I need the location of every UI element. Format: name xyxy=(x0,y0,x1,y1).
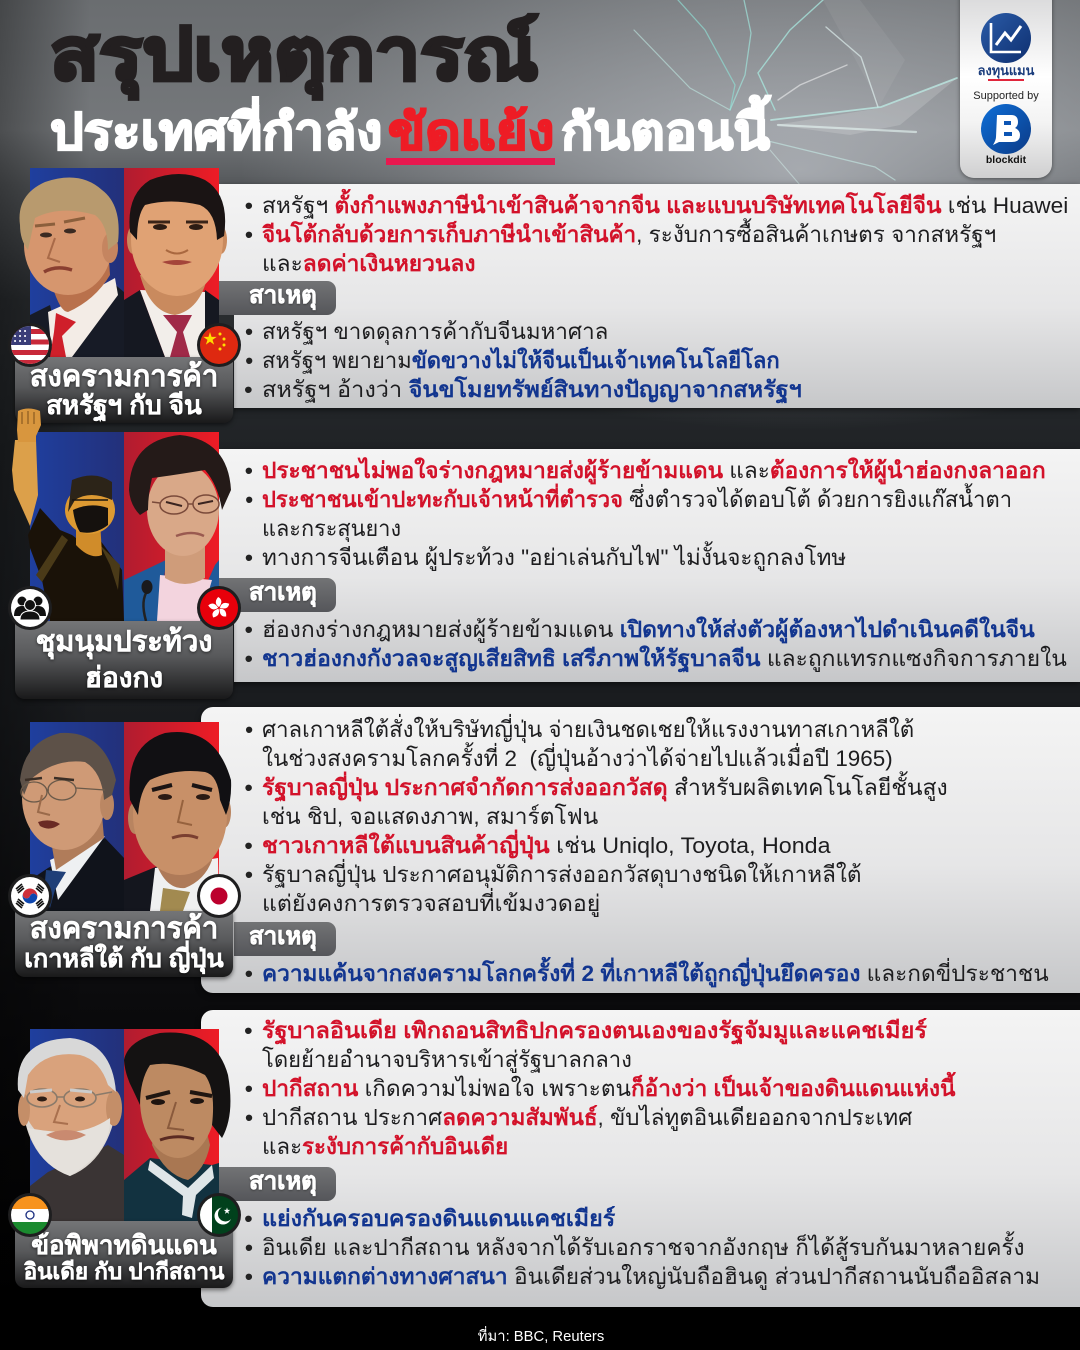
flags: India and Pakistan xyxy=(8,1193,241,1237)
card: territory dispute India and Pakistan xyxy=(8,1010,1080,1307)
tag: cause: สาเหตุ xyxy=(249,579,317,606)
flags: Korea and Japan xyxy=(8,874,241,918)
logo: blockdit xyxy=(981,104,1031,154)
flag: Pakistan xyxy=(197,1193,241,1237)
card: trade war Korea and Japan xyxy=(8,707,1080,993)
plate: trade war title xyxy=(15,911,233,977)
bullets: events: ในช่วงสงครามโลกครั้งที่ 2 (ญี่ปุ่นอ้างว่าได้จ่ายไปแล้วเมื่อปี 1965) xyxy=(262,746,893,771)
bullets: events: ประชาชนเข้าปะทะกับเจ้าหน้าที่ตำรวจ ซึ่งตำรวจได้ตอบโต้ ด้วยการยิงแก๊สน้ำตา xyxy=(262,487,1012,512)
plate: territory dispute title: ข้อพิพาทดินแดน xyxy=(31,1230,217,1260)
supported by: Supported by xyxy=(973,90,1039,102)
bullets: events xyxy=(246,457,1044,571)
bullets: events: แต่ยังคงการตรวจสอบที่เข้มงวดอยู่ xyxy=(262,891,600,916)
panel: India Pakistan text xyxy=(201,1010,1080,1307)
title line 1: สรุปเหตุการณ์ xyxy=(50,15,538,95)
tag: cause: สาเหตุ xyxy=(249,1168,317,1195)
bullets: events: รัฐบาลญี่ปุ่น ประกาศอนุมัติการส่งออกวัสดุบางชนิดให้เกาหลีใต้ xyxy=(262,862,861,887)
plate: trade war title xyxy=(15,357,233,423)
bullets: causes xyxy=(246,616,1066,673)
tag: cause: สาเหตุ xyxy=(249,282,317,309)
plate: trade war title: สงครามการค้า xyxy=(30,361,218,393)
plate: trade war title: สงครามการค้า xyxy=(30,913,218,945)
title xyxy=(50,12,772,165)
plate: territory dispute title: อินเดีย กับ ปากีสถาน xyxy=(24,1259,224,1284)
tag: cause xyxy=(219,1167,336,1201)
title line 2: กันตอนนี้ xyxy=(561,104,770,160)
source note: ที่มา: BBC, Reuters xyxy=(478,1329,604,1345)
bullets: causes: สหรัฐฯ พยายามขัดขวางไม่ให้จีนเป็นเจ้าเทคโนโลยีโลก xyxy=(262,348,780,373)
bullets: events: ประชาชนไม่พอใจร่างกฎหมายส่งผู้ร้ายข้ามแดน และต้องการให้ผู้นำฮ่องกงลาออก xyxy=(262,458,1046,483)
bullets: events: ปากีสถาน เกิดความไม่พอใจ เพราะตนก็อ้างว่า เป็นเจ้าของดินแดนแห่งนี้ xyxy=(262,1076,955,1101)
bullets: causes: สหรัฐฯ อ้างว่า จีนขโมยทรัพย์สินทางปัญญาจากสหรัฐฯ xyxy=(262,377,802,402)
plate: trade war title: สหรัฐฯ กับ จีน xyxy=(46,390,202,420)
bullets: events: สหรัฐฯ ตั้งกำแพงภาษีนำเข้าสินค้าจากจีน และแบนบริษัทเทคโนโลยีจีน เช่น Huawei xyxy=(262,193,1068,218)
logo: ลงทุนแมน xyxy=(981,13,1031,63)
bullets: events: ปากีสถาน ประกาศลดความสัมพันธ์, ขับไล่ทูตอินเดียออกจากประเทศ xyxy=(262,1105,912,1130)
card: Hong Kong protest xyxy=(8,408,1080,701)
bullets: events: จีนโต้กลับด้วยการเก็บภาษีนำเข้าสินค้า, ระงับการซื้อสินค้าเกษตร จากสหรัฐฯ xyxy=(262,222,996,247)
flags: US and China xyxy=(11,323,241,367)
title line 2: ประเทศที่กำลัง xyxy=(50,104,382,160)
photo: Moon and Abe xyxy=(20,722,232,911)
plate: protest title: ชุมนุมประท้วง xyxy=(36,626,212,658)
panel: US China text xyxy=(219,184,1080,408)
bullets: causes xyxy=(245,320,801,404)
bullets: events: ชาวเกาหลีใต้แบนสินค้าญี่ปุ่น เช่น Uniqlo, Toyota, Honda xyxy=(262,833,831,858)
plate: protest title xyxy=(15,621,233,699)
title line 2: ขัดแย้ง xyxy=(388,104,554,160)
title underline xyxy=(386,158,555,165)
title line 2 xyxy=(50,94,772,160)
bullets: events xyxy=(245,714,948,917)
flags: protest and Hong Kong xyxy=(8,586,241,630)
logo name: ลงทุนแมน xyxy=(978,63,1034,78)
bullets: causes: ฮ่องกงร่างกฎหมายส่งผู้ร้ายข้ามแดน เปิดทางให้ส่งตัวผู้ต้องหาไปดำเนินคดีในจีน xyxy=(262,617,1035,642)
bullets: causes: ชาวฮ่องกงกังวลจะสูญเสียสิทธิ เสรีภาพให้รัฐบาลจีน และถูกแทรกแซงกิจการภายใน xyxy=(262,646,1067,671)
flag: United States xyxy=(11,326,52,367)
photo: protester and Carrie Lam xyxy=(12,408,231,621)
flag: Japan xyxy=(197,874,241,918)
plate: protest title: ฮ่องกง xyxy=(85,662,163,693)
bullets: events xyxy=(246,188,1067,272)
bullets: events: ศาลเกาหลีใต้สั่งให้บริษัทญี่ปุ่น จ่ายเงินชดเชยให้แรงงานทาสเกาหลีใต้ xyxy=(262,717,914,742)
bullets: events: และกระสุนยาง xyxy=(262,516,401,541)
bullets: causes: สหรัฐฯ ขาดดุลการค้ากับจีนมหาศาล xyxy=(262,319,608,344)
tag: cause xyxy=(219,281,336,315)
blockdit name: blockdit xyxy=(986,154,1026,166)
photo: Modi and Imran Khan xyxy=(18,1029,230,1221)
bullets: events: เช่น ชิป, จอแสดงภาพ, สมาร์ตโฟน xyxy=(262,804,598,829)
icon: protesters xyxy=(8,586,52,630)
bullets: causes: ความแตกต่างทางศาสนา อินเดียส่วนใหญ่นับถือฮินดู ส่วนปากีสถานนับถืออิสลาม xyxy=(262,1264,1040,1289)
bullets: causes: แย่งกันครอบครองดินแดนแคชเมียร์ xyxy=(262,1206,615,1231)
bullets: events: และลดค่าเงินหยวนลง xyxy=(262,251,475,276)
bullets: events: และระงับการค้ากับอินเดีย xyxy=(262,1134,508,1159)
panel: Korea Japan text xyxy=(201,707,1080,993)
tag: cause xyxy=(234,922,336,956)
bullets: events: ทางการจีนเตือน ผู้ประท้วง "อย่าเล่นกับไฟ" ไม่งั้นจะถูกลงโทษ xyxy=(262,545,846,570)
logo underline xyxy=(988,79,1024,80)
flag: India xyxy=(8,1193,52,1237)
plate: trade war title: เกาหลีใต้ กับ ญี่ปุ่น xyxy=(24,945,224,973)
plate: territory dispute title xyxy=(15,1221,233,1288)
icon: cracked glass xyxy=(634,0,958,184)
bullets: causes: อินเดีย และปากีสถาน หลังจากได้รับเอกราชจากอังกฤษ ก็ได้สู้รบกันมาหลายครั้ง xyxy=(262,1235,1025,1260)
bullets: events: รัฐบาลญี่ปุ่น ประกาศจำกัดการส่งออกวัสดุ สำหรับผลิตเทคโนโลยีชั้นสูง xyxy=(262,775,948,800)
flag: South Korea xyxy=(8,874,52,918)
card: trade war US and China xyxy=(11,168,1080,426)
flag: China xyxy=(197,323,241,367)
bullets: events xyxy=(245,1018,956,1159)
bullets: causes xyxy=(245,1206,1040,1290)
bullets: events: รัฐบาลอินเดีย เพิกถอนสิทธิปกครองตนเองของรัฐจัมมูและแคชเมียร์ xyxy=(262,1018,927,1043)
bullets: causes: ความแค้นจากสงครามโลกครั้งที่ 2 ที่เกาหลีใต้ถูกญี่ปุ่นยึดครอง และกดขี่ประชาชน xyxy=(262,961,1049,986)
tag: cause xyxy=(219,578,336,612)
logo card xyxy=(960,0,1052,178)
photo: Trump and Xi xyxy=(20,168,227,357)
tag: cause: สาเหตุ xyxy=(249,923,317,950)
flag: Hong Kong xyxy=(197,586,241,630)
panel: Hong Kong text xyxy=(219,449,1080,682)
bullets: events: โดยย้ายอำนาจบริหารเข้าสู่รัฐบาลกลาง xyxy=(262,1047,632,1072)
